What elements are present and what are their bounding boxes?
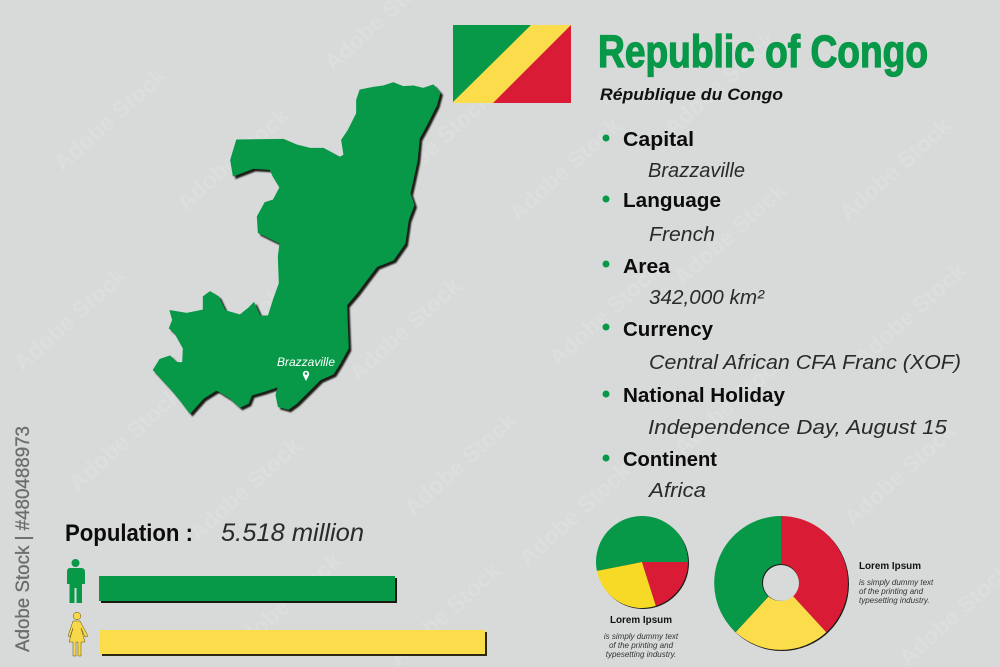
text: Adobe Stock xyxy=(374,87,496,201)
fact: area: Area xyxy=(623,256,671,278)
male population bar xyxy=(99,576,397,603)
fact: capital: Capital xyxy=(623,129,694,151)
map of Republic of Congo xyxy=(153,83,442,416)
text: Adobe Stock xyxy=(224,547,346,661)
pie caption: Lorem Ipsum xyxy=(610,615,672,626)
donut caption: typesetting industry. xyxy=(859,596,930,605)
pie caption: of the printing and xyxy=(609,641,674,650)
donut caption: of the printing and xyxy=(859,587,924,596)
donut chart xyxy=(714,516,849,651)
text: Adobe Stock xyxy=(49,62,171,176)
facts list xyxy=(602,129,961,502)
pie chart xyxy=(596,516,689,609)
donut caption xyxy=(859,561,934,605)
pie caption xyxy=(604,615,679,659)
pie caption: is simply dummy text xyxy=(604,632,679,641)
icon: man xyxy=(67,559,85,603)
text: Adobe Stock xyxy=(849,257,971,371)
fact: language: French xyxy=(649,224,715,246)
fact: national holiday xyxy=(602,385,948,439)
population heading: Population : xyxy=(65,520,193,547)
title: Republic of Congo xyxy=(598,26,928,77)
fact: continent: Continent xyxy=(623,449,717,471)
fact: national holiday: National Holiday xyxy=(623,385,786,407)
text: Adobe Stock xyxy=(64,382,186,496)
icon: woman xyxy=(68,612,88,656)
fact: currency xyxy=(602,319,961,374)
fact: area: 342,000 km² xyxy=(649,287,765,309)
pie caption: typesetting industry. xyxy=(606,650,676,659)
female population bar xyxy=(100,630,487,656)
capital label: Brazzaville xyxy=(277,357,335,369)
text: Adobe Stock xyxy=(834,112,956,226)
fact: capital xyxy=(602,129,745,182)
fact: language xyxy=(602,190,721,246)
text: Adobe Stock xyxy=(514,457,636,571)
text: Adobe Stock xyxy=(669,177,791,291)
text: Adobe Stock xyxy=(9,262,131,376)
fact: capital: Brazzaville xyxy=(648,160,745,182)
local name subtitle: République du Congo xyxy=(600,85,783,104)
fact: area xyxy=(602,256,765,309)
fact: continent: Africa xyxy=(648,480,706,502)
text: Adobe Stock xyxy=(504,112,626,226)
fact: language: Language xyxy=(623,190,721,212)
text: Adobe Stock xyxy=(344,272,466,386)
text: Adobe Stock xyxy=(172,102,294,216)
donut caption: is simply dummy text xyxy=(859,578,934,587)
fact: national holiday: Independence Day, August 15 xyxy=(648,417,948,439)
fact: currency: Currency xyxy=(623,319,714,341)
stock id vertical label: Adobe Stock | #480488973 xyxy=(13,426,34,652)
text: Adobe Stock xyxy=(659,27,781,141)
text: Adobe Stock xyxy=(184,432,306,546)
flag xyxy=(453,25,571,103)
text: Adobe Stock xyxy=(839,417,961,531)
icon: map pin xyxy=(303,371,309,381)
text: Adobe Stock xyxy=(399,407,521,521)
fact: continent xyxy=(602,449,717,502)
fact: currency: Central African CFA Franc (XOF) xyxy=(649,352,961,374)
population heading xyxy=(65,519,364,547)
text: Adobe Stock xyxy=(669,347,791,461)
population heading: 5.518 million xyxy=(221,519,364,547)
text: Adobe Stock xyxy=(229,227,351,341)
donut caption: Lorem Ipsum xyxy=(859,561,921,572)
text: Adobe Stock xyxy=(544,257,666,371)
